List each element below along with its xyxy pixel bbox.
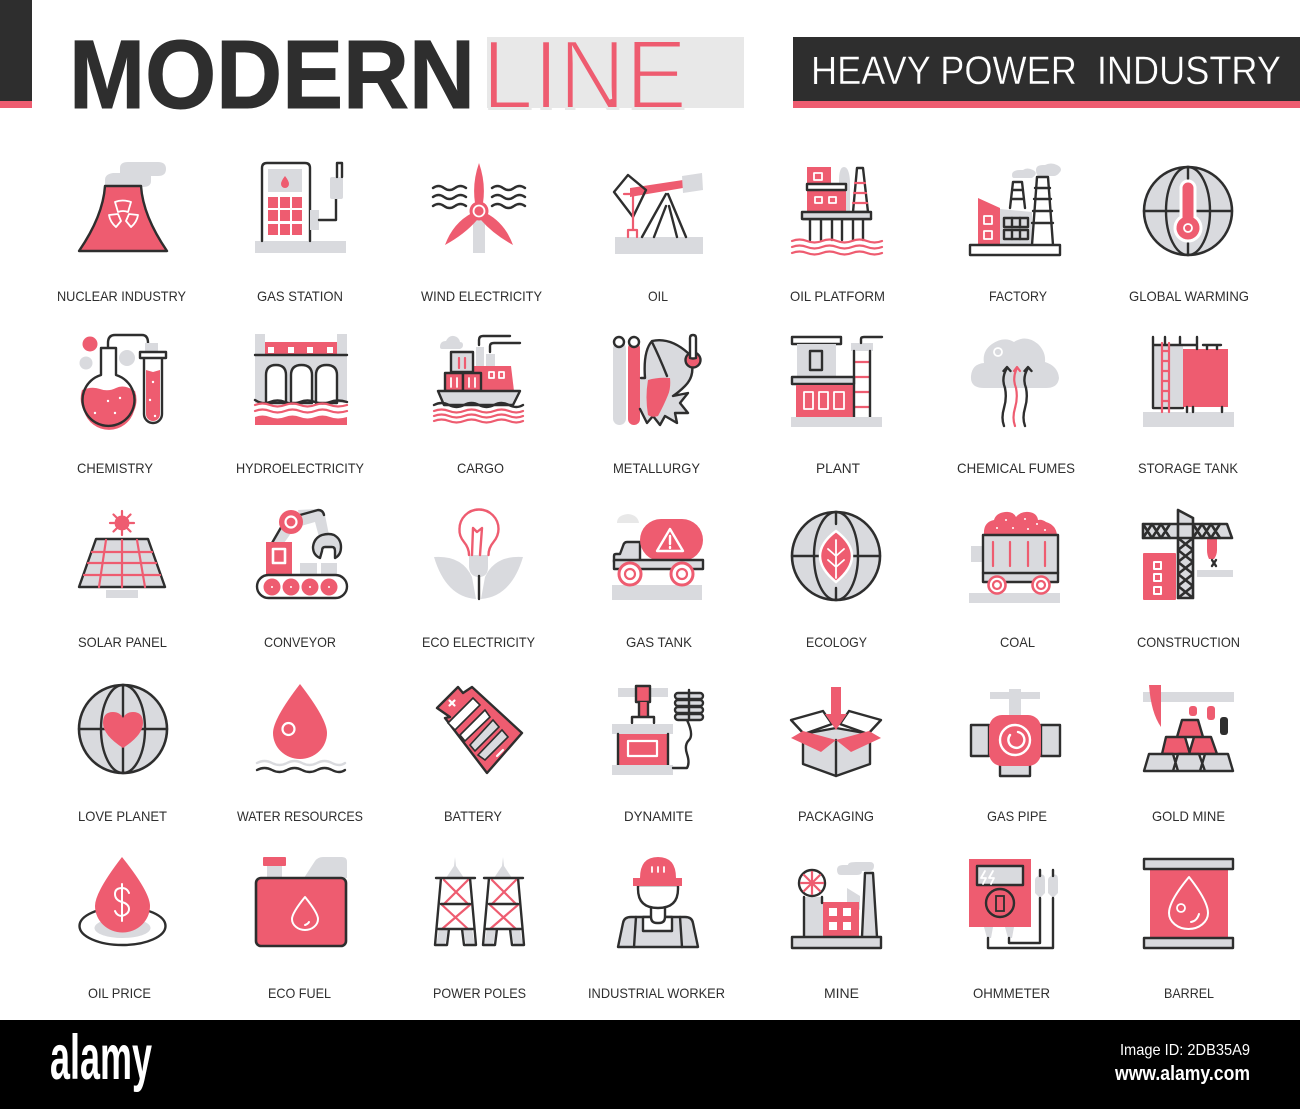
header <box>0 0 1300 130</box>
panel: eco fuel <box>256 857 347 1001</box>
icon: worker with helmet <box>618 857 698 947</box>
icon: globe with leaf <box>792 512 880 600</box>
panel: oil <box>614 173 703 304</box>
icon: mine with wheel tower <box>792 862 881 948</box>
panel: nuclear industry <box>57 162 187 304</box>
icon: transmission towers <box>435 857 524 945</box>
panel: conveyor <box>257 509 347 650</box>
icon: open box with arrow <box>791 687 881 776</box>
icon: oil pumpjack <box>614 173 703 254</box>
label: OIL <box>648 288 668 304</box>
panel: gas tank <box>612 514 703 650</box>
panel: cargo <box>434 336 523 476</box>
label: CHEMISTRY <box>77 460 154 476</box>
label: INDUSTRIAL WORKER <box>588 985 725 1001</box>
panel: ecology <box>792 512 880 650</box>
alamy logo: alamy <box>50 1023 152 1093</box>
panel: metallurgy <box>613 335 701 476</box>
icon: robotic arm on conveyor <box>257 509 347 598</box>
panel: factory <box>970 164 1061 304</box>
icon: solar panel and sun <box>79 511 165 598</box>
panel: power poles <box>433 857 526 1001</box>
panel: gas station <box>255 163 346 304</box>
label: BARREL <box>1164 985 1214 1001</box>
panel: dynamite <box>612 686 703 824</box>
icon: tanker truck <box>612 514 703 600</box>
label: GOLD MINE <box>1152 808 1225 824</box>
label: HYDROELECTRICITY <box>236 460 365 476</box>
icon: storage tanks and ladder <box>1143 337 1234 427</box>
icon: pickaxe and gold bars <box>1143 685 1234 771</box>
icon: coal cart <box>969 512 1060 603</box>
icon: detonator and dynamite <box>612 686 703 775</box>
icon: fuel canister <box>256 857 347 946</box>
icon: water drop on waves <box>257 684 345 772</box>
panel: battery <box>437 687 522 824</box>
panel: love planet <box>78 685 167 824</box>
label: OIL PLATFORM <box>790 288 885 304</box>
panel: packaging <box>791 687 881 824</box>
panel: plant <box>791 337 882 476</box>
icon: tower crane and building <box>1143 510 1233 600</box>
icon: bulb plant <box>434 510 523 599</box>
panel: barrel <box>1144 859 1233 1001</box>
panel: industrial worker <box>588 857 725 1001</box>
label: COAL <box>1000 634 1035 650</box>
panel: oil price <box>80 857 166 1001</box>
icon: power plant building <box>791 337 882 427</box>
panel: coal <box>969 512 1060 650</box>
label: LOVE PLANET <box>78 808 167 824</box>
label: GAS PIPE <box>987 808 1047 824</box>
panel: chemical fumes <box>957 338 1075 476</box>
label: GAS STATION <box>257 288 343 304</box>
label: ECO FUEL <box>268 985 331 1001</box>
panel: water resources <box>237 684 363 824</box>
subtitle banner <box>793 37 1300 108</box>
panel: hydroelectricity <box>236 334 365 476</box>
label: SOLAR PANEL <box>78 634 167 650</box>
header accent bar <box>0 0 32 108</box>
label: GLOBAL WARMING <box>1129 288 1249 304</box>
icon: rising fumes under cloud <box>971 338 1059 426</box>
icon: globe with thermometer <box>1144 167 1232 255</box>
icon: pipe valve <box>971 689 1060 776</box>
icon: ohmmeter with probes <box>969 859 1058 948</box>
panel: chemistry <box>77 335 166 476</box>
panel: solar panel <box>78 511 167 650</box>
icon: cooling tower <box>79 162 167 251</box>
website: www.alamy.com <box>1114 1063 1250 1085</box>
panel: storage tank <box>1138 337 1239 476</box>
label: WIND ELECTRICITY <box>421 288 543 304</box>
panel: oil platform <box>790 167 885 304</box>
title: LINE on grey band: LINE <box>482 20 687 130</box>
label: CARGO <box>457 460 504 476</box>
label: ECO ELECTRICITY <box>422 634 536 650</box>
icon: crucible and thermometer <box>613 335 700 425</box>
icon: oil barrel <box>1144 859 1233 948</box>
footer bar <box>0 1020 1300 1109</box>
panel: construction <box>1137 510 1240 650</box>
icon: wind turbine <box>433 163 525 253</box>
icon: hydro dam <box>255 334 347 425</box>
panel: eco electricity <box>422 510 536 650</box>
label: CONSTRUCTION <box>1137 634 1240 650</box>
image id: Image ID: 2DB35A9 <box>1120 1042 1250 1059</box>
label: DYNAMITE <box>624 808 693 824</box>
label: ECOLOGY <box>806 634 868 650</box>
panel: ohmmeter <box>969 859 1058 1001</box>
title: MODERN: MODERN <box>69 20 475 129</box>
label: POWER POLES <box>433 985 526 1001</box>
icon: factory with chimneys <box>970 164 1061 255</box>
label: PLANT <box>816 460 860 476</box>
icon: oil drop with dollar <box>80 857 166 945</box>
label: PACKAGING <box>798 808 874 824</box>
panel: wind electricity <box>421 163 543 304</box>
icon: flask and test tube <box>80 335 166 430</box>
label: WATER RESOURCES <box>237 808 363 824</box>
label: GAS TANK <box>626 634 693 650</box>
label: OHMMETER <box>973 985 1050 1001</box>
icon: globe with heart <box>79 685 167 773</box>
label: FACTORY <box>989 288 1048 304</box>
label: MINE <box>824 985 859 1001</box>
label: CONVEYOR <box>264 634 336 650</box>
panel: gas pipe <box>971 689 1060 824</box>
label: BATTERY <box>444 808 503 824</box>
icon: tilted battery <box>437 687 522 773</box>
icon: cargo ship <box>434 336 523 422</box>
icon: fuel pump <box>255 163 346 253</box>
label: OIL PRICE <box>88 985 151 1001</box>
label: STORAGE TANK <box>1138 460 1239 476</box>
panel: mine <box>792 862 881 1001</box>
label: METALLURGY <box>613 460 701 476</box>
label: CHEMICAL FUMES <box>957 460 1075 476</box>
panel: global warming <box>1129 167 1249 304</box>
label: NUCLEAR INDUSTRY <box>57 288 187 304</box>
panel: gold mine <box>1143 685 1234 824</box>
icon: offshore rig <box>792 167 882 254</box>
